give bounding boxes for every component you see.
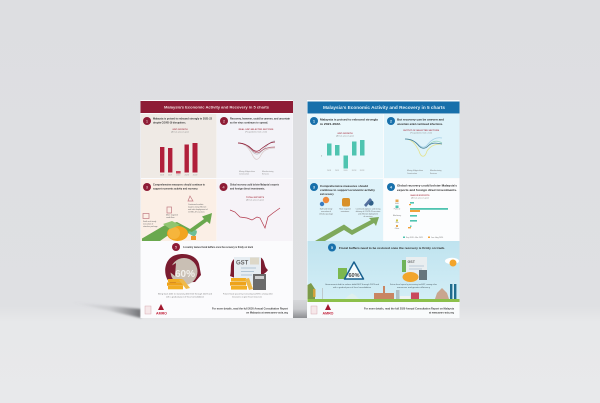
footer text: at www.amro-asia.org (429, 311, 455, 314)
icons: measures (320, 197, 374, 207)
shadow: poster left (70, 302, 141, 318)
bar chart: E&E (395, 203, 400, 205)
icon: 60% warning triangle: 60% (348, 273, 360, 279)
legend: Manufacturing (262, 170, 273, 173)
panel 5 captions (325, 283, 437, 289)
icon: growth arrow (315, 217, 379, 241)
chart title: GDP GROWTH (337, 133, 353, 135)
measure notes: execution of (321, 210, 331, 213)
chart title (411, 194, 430, 200)
panel 4 heading (230, 184, 280, 190)
bar chart: Gas (395, 222, 399, 224)
panel 1 heading (320, 118, 378, 126)
bar chart: 2021f (352, 170, 357, 172)
measure notes: and safe deployment of (188, 208, 208, 211)
panel 4 heading: Global recovery could bolster Malaysia's exports (230, 184, 280, 186)
panel 3 heading: Comprehensive measures should continue to (153, 184, 205, 186)
panel 5 captions: with a gradual pace of fiscal consolidation (166, 296, 204, 298)
measure notes: stimulus package (143, 225, 158, 228)
icon: 60% warning triangle (338, 262, 364, 279)
icon: GST tax: GST (236, 260, 249, 266)
bar chart (160, 143, 198, 176)
chart title: (Pre-pandemic level = 100) (245, 132, 267, 134)
bar chart: 2018 (160, 174, 164, 176)
panel 5: fiscal buffers (141, 241, 292, 318)
number badge 5: 5 (175, 244, 178, 249)
number badge 3: 3 (313, 184, 316, 189)
bar chart: 2020 (344, 170, 348, 172)
header: blue edition (308, 102, 460, 114)
panel 5 captions: Future fiscal space by increasing tax/GST, among other (223, 292, 273, 296)
icons: measures (143, 196, 193, 218)
icon: sun and cloud (445, 258, 459, 266)
panel 2 heading (397, 118, 444, 126)
legend (239, 170, 273, 176)
panel 4: exports bars (384, 179, 460, 241)
panel 5 captions (158, 292, 273, 298)
panel 2 heading: Recovery, however, could be uneven, and uncertain (230, 118, 290, 120)
number badge 5 (328, 244, 336, 252)
measure notes: stimulus package (319, 212, 333, 216)
panel 4 heading (397, 184, 457, 192)
panel 2 heading: But recovery can be uneven and (397, 118, 444, 122)
panel 3 heading: Comprehensive measures should (320, 184, 368, 188)
legend: Jan - Aug 2020 (431, 236, 443, 239)
panel 1 heading: Malaysia is poised to rebound strongly in 2021-22 (153, 118, 213, 120)
panel 5 captions: Future fiscal space by increasing tax/GST, among other (390, 283, 437, 286)
icon: plant (188, 230, 197, 240)
footer: red edition (145, 304, 289, 316)
measure notes: credit flow (166, 216, 175, 219)
icon: growth arrow (142, 213, 212, 241)
panel 5: fiscal buffers (308, 241, 460, 302)
icon: 60% debt: 60% (175, 269, 195, 280)
measure notes: More targeted (166, 214, 178, 216)
bar chart: Machinery (393, 215, 401, 217)
panel 1 heading (153, 118, 213, 124)
chart title: OUTPUT OF SELECTED SECTORS (403, 130, 440, 132)
footer text: For more details, read the full 2020 Annual Consultation Report (212, 308, 288, 310)
chart title: MAJOR EXPORTS (411, 194, 430, 197)
logos (145, 304, 167, 316)
bar chart: 2018 (327, 170, 331, 172)
icon: GST form: GST (408, 260, 416, 264)
bar chart: 2021f (185, 174, 190, 176)
panel 5 captions: with a gradual pace of fiscal consolidation (333, 286, 371, 289)
panel 4 heading: and foreign direct investments. (230, 188, 265, 190)
chart title: (Annual, year-on-year) (411, 197, 429, 200)
panel 5 heading: Fiscal buffers need to be restored once the recovery is firmly on track. (339, 246, 445, 250)
chart title: REAL GDP-SELECTED SECTORS (239, 128, 274, 131)
panel 1 heading: Malaysia is poised to rebound strongly (320, 118, 378, 122)
panel 4 heading: exports and foreign direct investments. (397, 188, 457, 192)
panel 5 captions: measures and greater efficiency (397, 286, 430, 289)
panel 3 heading: and recovery. (320, 192, 334, 196)
panel 1 heading: despite COVID-19 disruptions. (153, 122, 186, 124)
measure notes: Swift and timely (320, 208, 332, 210)
shadow: poster gap (293, 300, 307, 318)
chart title: (Annual, year-on-year) (246, 199, 264, 202)
poster: blue edition (307, 100, 460, 318)
number badge 5: 5 (331, 245, 334, 250)
chart title: (Annual, year-on-year) (336, 135, 354, 138)
panel 3: measures (141, 179, 216, 241)
number badge 4: 4 (390, 184, 393, 189)
legend: Mining & Agriculture (239, 170, 255, 173)
icon: GST form (402, 257, 427, 282)
line chart (230, 208, 280, 228)
bar chart: 2019 (168, 174, 172, 176)
legend (407, 169, 441, 175)
line chart (405, 138, 442, 156)
panel 3 heading (153, 184, 205, 190)
footer: blue edition (311, 304, 455, 316)
number badge 2: 2 (223, 118, 226, 123)
chart title (239, 128, 274, 134)
measure notes: of vaccines (364, 216, 373, 218)
measure notes: Swift and timely (143, 220, 156, 223)
number badge 1: 1 (313, 118, 316, 123)
measure notes: Continued vigilance and strong (356, 208, 380, 210)
skyline illustration (308, 283, 460, 302)
measure notes: assistance (341, 210, 349, 213)
bar chart: 2020 (176, 174, 180, 176)
header: red edition: Malaysia's Economic Activity and Recovery in 5 charts (164, 105, 269, 110)
panel 1 heading: in 2021-2022. (320, 122, 341, 126)
icon: coins (163, 221, 188, 241)
header: red edition (140, 101, 293, 113)
header: blue edition: Malaysia's Economic Activity and Recovery in 5 charts (323, 105, 446, 110)
panel 4: total exports (217, 179, 292, 241)
line chart (238, 141, 275, 159)
logos (311, 304, 334, 316)
poster: red edition (140, 100, 293, 318)
chart title (336, 133, 354, 138)
panel 2 heading: as the virus continues to spread. (230, 122, 268, 124)
legend: Services (262, 174, 269, 176)
panel 3 heading: continue to support economic activity (320, 188, 375, 192)
bar chart: 2019 (335, 170, 339, 172)
number badge 3: 3 (146, 184, 149, 189)
chart title: GDP GROWTH (172, 129, 188, 131)
bar chart: Other (395, 227, 400, 230)
measure notes: More targeted (339, 208, 351, 210)
panel 3 heading (320, 184, 375, 196)
chart title: (Pre-pandemic level = 100) (410, 133, 432, 135)
panel 3: measures (308, 179, 383, 241)
measure notes: execution of (143, 222, 154, 226)
logos: AMRO (156, 312, 167, 316)
panel 5 captions: measures, to give fiscal resources (232, 296, 262, 298)
bar chart: 2022f (360, 170, 365, 172)
measure notes: delivery of COVID-19 vaccines (356, 211, 380, 213)
footer text (364, 308, 455, 314)
measure notes: targets using effective (188, 206, 206, 208)
chart title: TOTAL EXPORTS (246, 196, 265, 199)
icon: 60% debt (165, 254, 201, 289)
panel 1: GDP growth (308, 114, 383, 178)
chart title (171, 129, 189, 134)
panel 2: MIEIC line chart (384, 114, 460, 178)
measure notes (143, 203, 208, 228)
legend: Services (430, 173, 437, 175)
chart title (403, 130, 440, 135)
chart title (246, 196, 265, 202)
bar chart (393, 200, 448, 230)
panel 2: MIEIC line chart (217, 114, 292, 178)
bar chart: Palm oil (394, 208, 401, 210)
icon: GST tax (230, 257, 268, 290)
legend: Mining & Agriculture (407, 169, 423, 172)
measure notes: and effective deployment (358, 212, 378, 216)
measure notes (319, 208, 380, 218)
panel 3 heading: support economic activity and recovery. (153, 188, 198, 190)
panel 5 captions: Bring back debt to statutory debt limit through 2023 and (158, 292, 212, 296)
measure notes: COVID-19 vaccines (188, 212, 205, 214)
legend: Construction (407, 172, 417, 175)
panel 2 heading (230, 118, 290, 124)
logos: AMRO (323, 312, 334, 316)
legend: Manufacturing (430, 169, 441, 172)
number badge 2: 2 (390, 118, 393, 123)
legend: Sep 2020 - Mar 2021 (406, 237, 423, 239)
panel 1: GDP growth (141, 114, 216, 178)
bar chart: 2022f (193, 174, 198, 176)
footer text: For more details, read the full 2020 Annual Consultation Report on Malaysia (364, 308, 455, 310)
footer text (212, 308, 289, 314)
measure notes: Continued realistic (188, 203, 204, 206)
number badge 1: 1 (146, 118, 149, 123)
panel 4 heading: Global recovery could bolster Malaysia's (397, 184, 457, 188)
panel 5 captions: Government debt to reduce debt/GDP through 2023 and (325, 283, 379, 286)
legend (403, 236, 443, 239)
number badge 4: 4 (222, 184, 225, 189)
chart title: (Annual, year-on-year) (171, 131, 189, 134)
legend: Construction (239, 172, 249, 176)
number badge 5 (172, 243, 180, 251)
panel 5 heading: A country names fiscal buffers once the recovery is firmly on track (183, 246, 254, 249)
bar chart: 0 (321, 156, 323, 158)
panel 2 heading: uncertain amid continued infections. (397, 122, 443, 126)
footer text: on Malaysia at www.amro-asia.org (246, 311, 289, 314)
bar chart (321, 140, 365, 172)
